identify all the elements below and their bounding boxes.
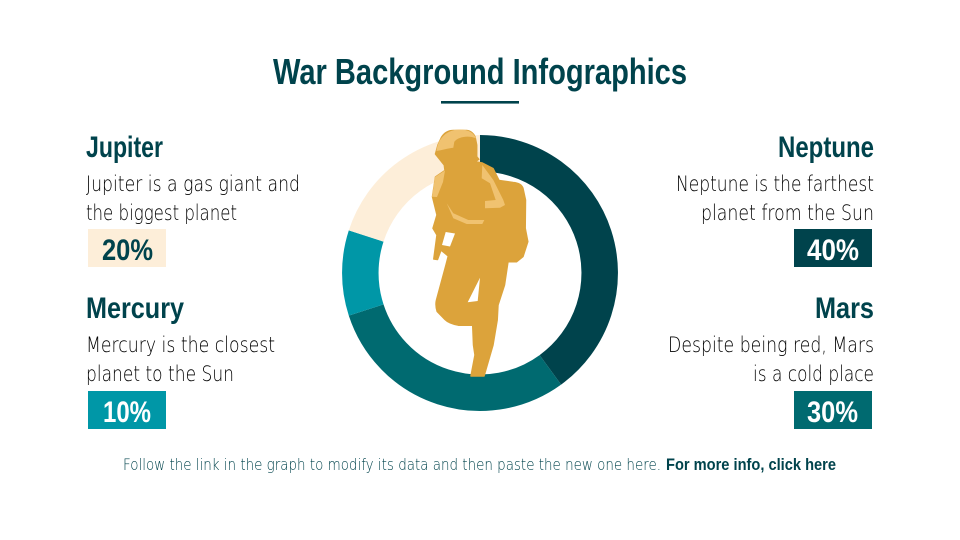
text: Jupiter description: Jupiter is a gas giant and (86, 172, 300, 196)
footer note: Follow the link in the graph to modify its data and then paste the new one here. (123, 455, 661, 474)
text: Mercury description: planet to the Sun (86, 362, 234, 386)
heading: Jupiter: Jupiter (86, 131, 163, 164)
text: Mars description (668, 333, 874, 386)
heading: Mercury: Mercury (86, 292, 184, 325)
helmet highlight (436, 130, 476, 151)
value: 30%: 30% (807, 396, 858, 429)
text: Neptune description (676, 172, 874, 225)
text: Mars description: is a cold place (753, 362, 874, 386)
icon: soldier silhouette (432, 130, 528, 376)
segment: Mercury 10% (360, 236, 366, 310)
donut chart (360, 153, 600, 393)
torso highlight (482, 165, 505, 208)
segment: Mars 30% (366, 310, 550, 393)
value: 30% (794, 391, 872, 429)
segment: Neptune 40% (480, 153, 600, 370)
text: Neptune description: Neptune is the farthest (676, 172, 874, 196)
heading: Mars: Mars (815, 292, 874, 325)
panel: Jupiter (86, 131, 300, 267)
text: Mars description: Despite being red, Mars (668, 333, 874, 357)
value: 40% (794, 229, 872, 267)
arm highlight (447, 203, 484, 224)
value: 20%: 20% (102, 234, 153, 267)
panel: Mercury (86, 292, 275, 429)
segment: Jupiter 20% (366, 153, 480, 236)
text: Jupiter description (86, 172, 300, 225)
value: 10% (88, 391, 166, 429)
title: War Background Infographics (273, 51, 687, 92)
value: 20% (88, 229, 166, 267)
text: Jupiter description: the biggest planet (86, 201, 237, 225)
panel: Neptune (676, 131, 874, 267)
text: Neptune description: planet from the Sun (701, 201, 874, 225)
value: 10%: 10% (103, 396, 151, 429)
shoulder highlight (432, 170, 445, 197)
footer note: For more info, click here (666, 455, 836, 474)
value: 40%: 40% (807, 234, 859, 267)
text: Mercury description (86, 333, 275, 386)
text: Mercury description: Mercury is the closest (86, 333, 275, 357)
heading: Neptune: Neptune (778, 131, 874, 164)
panel: Mars (668, 292, 874, 429)
